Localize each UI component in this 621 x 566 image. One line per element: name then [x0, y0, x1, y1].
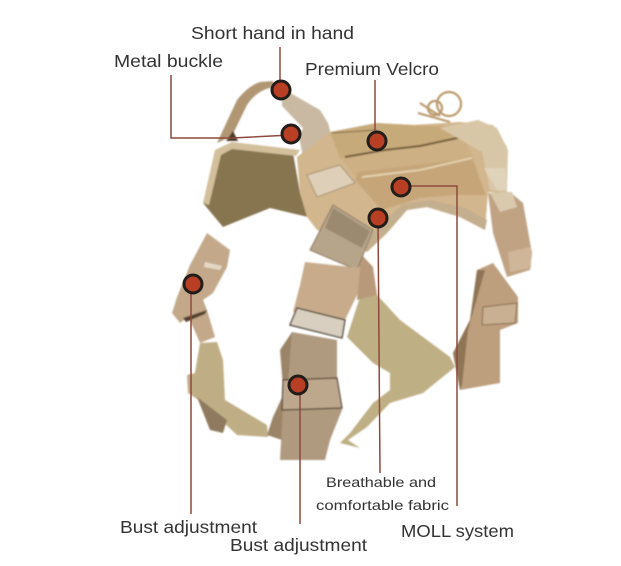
right side buckle: [488, 192, 532, 277]
harness illustration: [172, 81, 532, 460]
label: breathable fabric: Breathable and: [326, 474, 436, 490]
handle strap: [217, 81, 346, 192]
stitched tab on handle: [307, 165, 355, 197]
label: bust adjustment left: Bust adjustment: [120, 517, 257, 537]
center chest strap: [267, 205, 373, 460]
label: metal buckle: Metal buckle: [114, 51, 223, 71]
lining top trim: [203, 142, 300, 205]
right lower strap: [453, 263, 518, 390]
label: premium velcro: Premium Velcro: [305, 59, 439, 79]
thin side strap: [267, 332, 292, 440]
metal buckle marker: [226, 131, 238, 141]
body edge trim: [358, 200, 487, 252]
D ring: [418, 92, 461, 122]
back strap: [440, 120, 508, 193]
left lower dark edge: [197, 397, 227, 433]
main webbing: [280, 332, 342, 460]
left lower panel: [187, 342, 268, 437]
marker dots: [184, 81, 410, 394]
label: short hand in hand: Short hand in hand: [191, 23, 354, 43]
inner lining: [203, 147, 308, 227]
metal bar: [290, 308, 345, 338]
far leg strap: [357, 253, 377, 300]
main back panel: [297, 122, 507, 252]
stitched tab on back strap: [484, 168, 507, 190]
right lower chest panel: [340, 295, 455, 448]
buckle: [293, 262, 360, 320]
velcro patch: [310, 205, 373, 270]
left strap with buckle: [172, 233, 230, 343]
MOLLE webbing: [330, 123, 486, 210]
slider: [282, 378, 342, 410]
leader lines: [171, 47, 457, 524]
label: bust adjustment center: Bust adjustment: [230, 535, 367, 555]
label: breathable fabric: [316, 474, 449, 513]
label: MOLL system: MOLL system: [401, 521, 514, 541]
label: breathable fabric: comfortable fabric: [316, 497, 449, 513]
